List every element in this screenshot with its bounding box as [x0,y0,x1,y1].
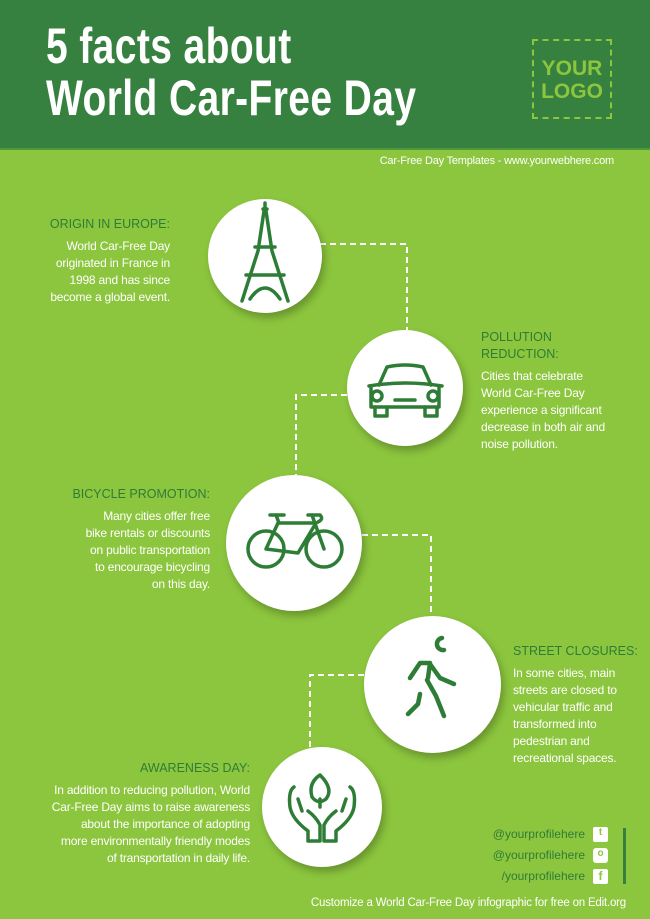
icon: eiffel tower [208,199,322,313]
fact 5 text [52,761,250,865]
fact 3 text: on public transportation [90,543,210,557]
social handles: @yourprofilehere [493,827,585,841]
social handles [493,827,585,883]
fact 3 text: BICYCLE PROMOTION: [72,487,210,501]
fact 2 text: decrease in both air and [481,420,605,434]
logo placeholder: YOUR [542,57,602,80]
footer: Customize a World Car-Free Day infographic for free on Edit.org [311,897,626,909]
fact 4 text: recreational spaces. [513,751,616,765]
icon: walking person [364,616,501,753]
fact 5 text: Car-Free Day aims to raise awareness [52,800,250,814]
subtitle: Car-Free Day Templates - www.yourwebhere.com [380,155,614,167]
logo placeholder [532,39,612,119]
fact 1 text: World Car-Free Day [66,239,170,253]
fact 3 text: Many cities offer free [103,509,210,523]
icon: hands with leaf [262,747,382,867]
fact 4 text: vehicular traffic and [513,700,613,714]
fact 3 text [72,487,210,591]
fact 2 text: Cities that celebrate [481,369,583,383]
fact 1 text: ORIGIN IN EUROPE: [50,217,170,231]
fact 5 text: In addition to reducing pollution, World [54,783,250,797]
fact 4 text: STREET CLOSURES: [513,644,638,658]
fact 2 text: POLLUTION [481,330,552,344]
social icons [593,827,608,884]
icon: bicycle [226,475,362,611]
fact 1 text: become a global event. [50,290,170,304]
title: World Car-Free Day [46,70,416,126]
fact 5 text: about the importance of adopting [81,817,250,831]
fact 2 text: REDUCTION: [481,347,559,361]
fact 1 text: 1998 and has since [70,273,170,287]
fact 4 text: transformed into [513,717,597,731]
fact 4 text: In some cities, main [513,666,615,680]
fact 4 text [513,644,638,765]
logo placeholder: LOGO [541,80,603,103]
fact 3 text: to encourage bicycling [95,560,210,574]
fact 3 text: on this day. [152,577,210,591]
fact 1 text [50,217,170,304]
fact 4 text: pedestrian and [513,734,590,748]
fact 2 text: noise pollution. [481,437,558,451]
social icons: f [598,869,602,883]
fact 5 text: more environmentally friendly modes [61,834,250,848]
social handles: /yourprofilehere [502,869,585,883]
header band [0,0,650,150]
fact 1 text: originated in France in [56,256,170,270]
fact 4 text: streets are closed to [513,683,617,697]
fact 2 text: World Car-Free Day [481,386,585,400]
fact 5 text: of transportation in daily life. [107,851,250,865]
icon: car [347,330,463,446]
social handles: @yourprofilehere [493,848,585,862]
title: 5 facts about [46,18,292,74]
social icons: t [599,827,602,838]
fact 2 text [481,330,605,451]
fact 5 text: AWARENESS DAY: [140,761,250,775]
fact 3 text: bike rentals or discounts [86,526,210,540]
social icons: o [597,848,604,859]
fact 2 text: experience a significant [481,403,602,417]
title [46,18,416,126]
